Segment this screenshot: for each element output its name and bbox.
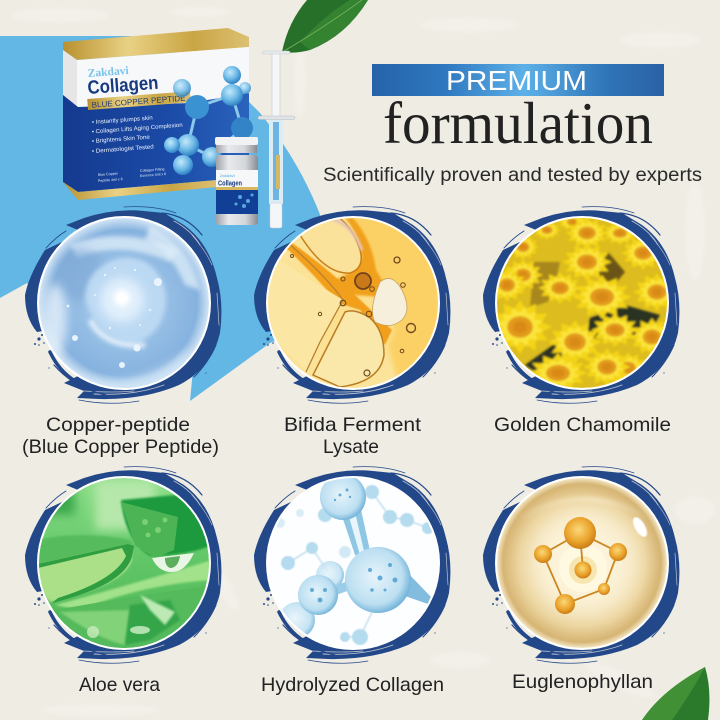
box footer text: Essence 4ml x 6 [140,172,166,178]
label: Bifida Ferment [284,414,422,436]
label: Euglenophyllan [512,671,653,693]
brush ring [483,207,679,403]
panel: golden chamomile [483,207,681,436]
leaf bottom right [642,667,709,720]
image: flowers [495,216,669,390]
box blue face [63,93,249,192]
image: golden molecule [495,476,669,650]
label: (Blue Copper Peptide) [22,436,219,458]
image: aloe [37,476,212,650]
brush ring [254,467,450,663]
panel: aloe vera [25,467,221,696]
box footer text: Blue Copper [98,171,119,177]
image: molecules [266,474,440,650]
label: Hydrolyzed Collagen [261,674,444,696]
brush ring [483,467,679,663]
label: Lysate [323,436,379,458]
label: Copper-peptide [46,414,190,436]
brush ring [25,207,221,403]
bullets: • Dermatologist Tested [92,144,154,155]
label: Aloe vera [79,674,160,696]
vial [215,137,258,225]
label [22,414,219,458]
box top gold [63,28,249,60]
bullets: • Brightens Skin Tone [92,135,150,145]
brush ring [254,207,450,403]
brush ring [25,467,221,663]
bullets [92,115,183,155]
image: oil [265,215,440,390]
heading: formulation [383,90,653,156]
header band [372,64,664,96]
vial molecule [234,194,254,208]
PREMIUM: PREMIUM [446,65,587,96]
box left side [63,50,77,110]
molecule on box [164,66,253,175]
panel: euglenophyllan [483,467,679,693]
box footer text [98,167,166,183]
bullets: • Instantly plumps skin [92,115,153,126]
syringe [258,51,295,228]
image: gel [37,216,211,395]
panel: hydrolyzed collagen [254,467,450,696]
product name: Collagen [87,73,159,99]
label [284,414,422,458]
box footer text: Peptide 4ml x 6 [98,177,123,183]
box white face [77,47,249,120]
panel: copper peptide [22,207,221,458]
gold label: BLUE COPPER PEPTIDE [91,94,186,110]
product box [63,28,253,200]
box footer text: Collagen Filling [140,167,165,173]
bullets: • Collagen Lifts Aging Complexion [92,123,183,135]
brand text: Zakdavi [87,65,130,80]
vial name: Collagen [218,178,242,188]
label: Golden Chamomile [494,414,671,436]
panel: bifida ferment lysate [254,207,450,458]
blue background shape [0,36,330,401]
leaf top [282,0,368,53]
box bottom gold [63,180,217,200]
vial brand: Zakdavi [220,173,235,178]
subheading: Scientifically proven and tested by experts [323,165,702,186]
